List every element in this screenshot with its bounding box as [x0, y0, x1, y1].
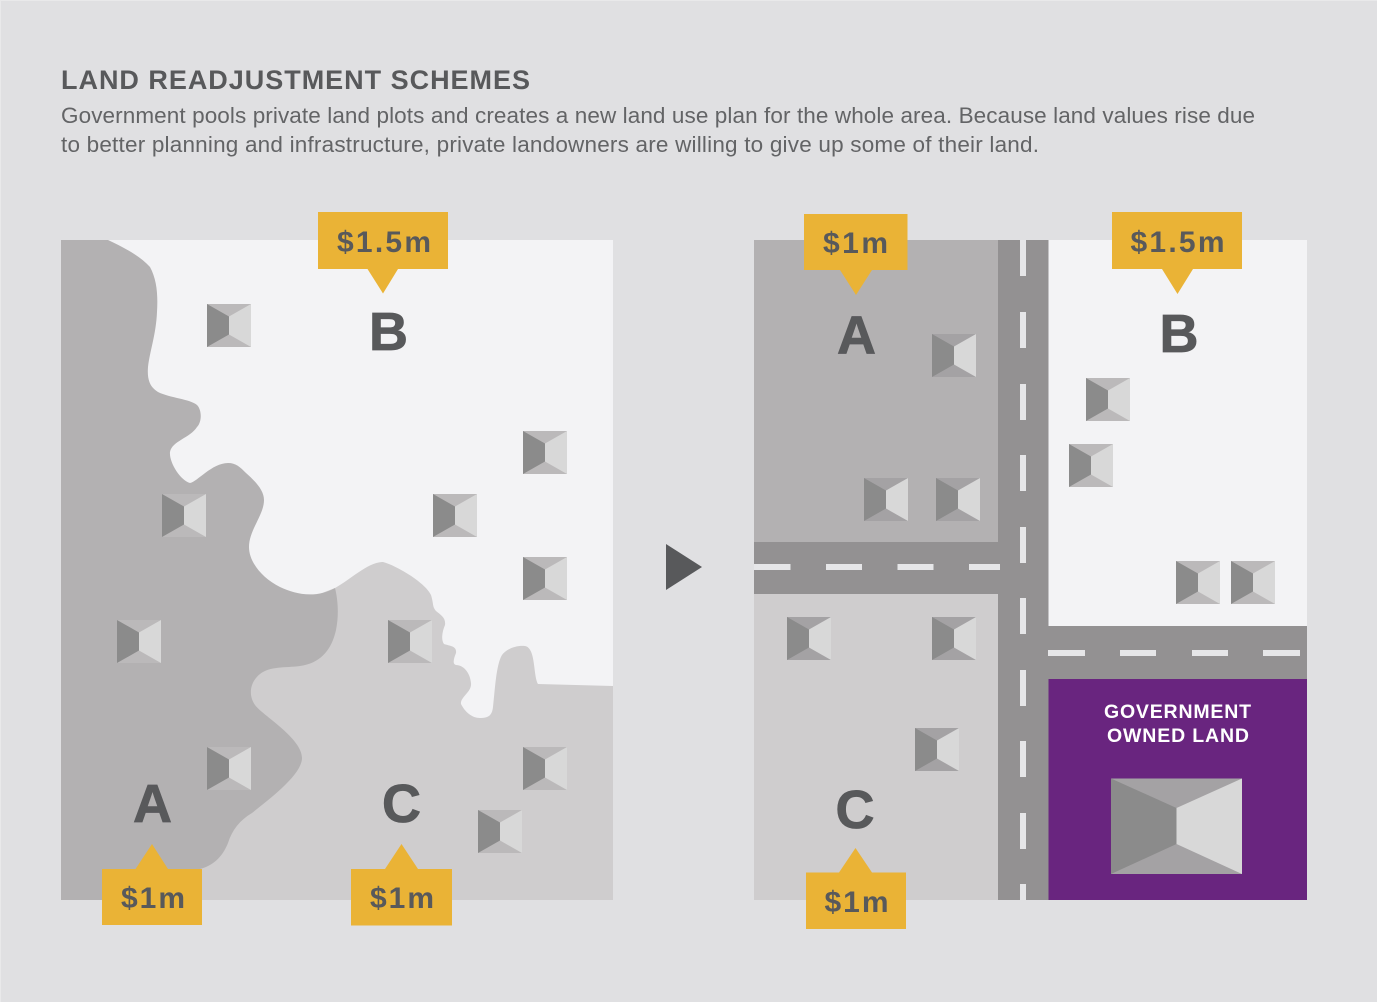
plot letter B: B	[369, 302, 408, 362]
buildings on plot C	[787, 617, 976, 771]
government land label	[1104, 701, 1251, 747]
price tag: B $1.5m: $1.5m	[337, 226, 431, 259]
price tag: C $1m: $1m	[370, 882, 434, 915]
roads	[754, 240, 1307, 900]
price tag: B $1.5m	[1112, 212, 1242, 294]
plot B background	[61, 240, 613, 900]
government land label: OWNED LAND	[1107, 725, 1249, 747]
price tag: B $1.5m: $1.5m	[1130, 226, 1224, 259]
plot B rectangle	[1048, 240, 1307, 626]
panel: before, irregular private plots	[61, 212, 613, 926]
price tag: A $1m	[102, 844, 202, 925]
plot letter C: C	[836, 780, 874, 840]
arrow	[666, 544, 702, 590]
plot letter B: B	[1160, 304, 1198, 364]
price tag: B $1.5m	[318, 212, 448, 294]
plot A irregular shape	[61, 240, 338, 900]
description text: to better planning and infrastructure, private landowners are willing to give up some of their land.	[61, 132, 1039, 157]
plot letter A: A	[133, 774, 172, 834]
plot C rectangle	[754, 594, 998, 900]
government building	[1111, 778, 1242, 874]
plot letter A: A	[837, 306, 876, 366]
buildings on original plots	[117, 304, 567, 853]
government land label: GOVERNMENT	[1104, 701, 1251, 723]
government owned land plot	[1048, 679, 1307, 900]
price tag: C $1m	[351, 844, 452, 926]
price tag: A $1m: $1m	[121, 882, 185, 915]
description text: Government pools private land plots and creates a new land use plan for the whole area. Because land values rise due	[61, 103, 1255, 128]
price tag: C $1m	[806, 848, 906, 929]
plot C irregular shape	[200, 562, 613, 900]
plot letter C: C	[382, 774, 421, 834]
title: LAND READJUSTMENT SCHEMES	[61, 65, 530, 95]
buildings on plot B	[1069, 378, 1275, 604]
price tag: A $1m: $1m	[823, 227, 888, 260]
plot A rectangle	[754, 240, 998, 542]
panel: after, replanned plots with roads	[754, 212, 1307, 929]
description text	[61, 103, 1255, 157]
buildings on plot A	[864, 334, 980, 521]
price tag: A $1m	[804, 214, 908, 295]
price tag: C $1m: $1m	[824, 886, 888, 919]
